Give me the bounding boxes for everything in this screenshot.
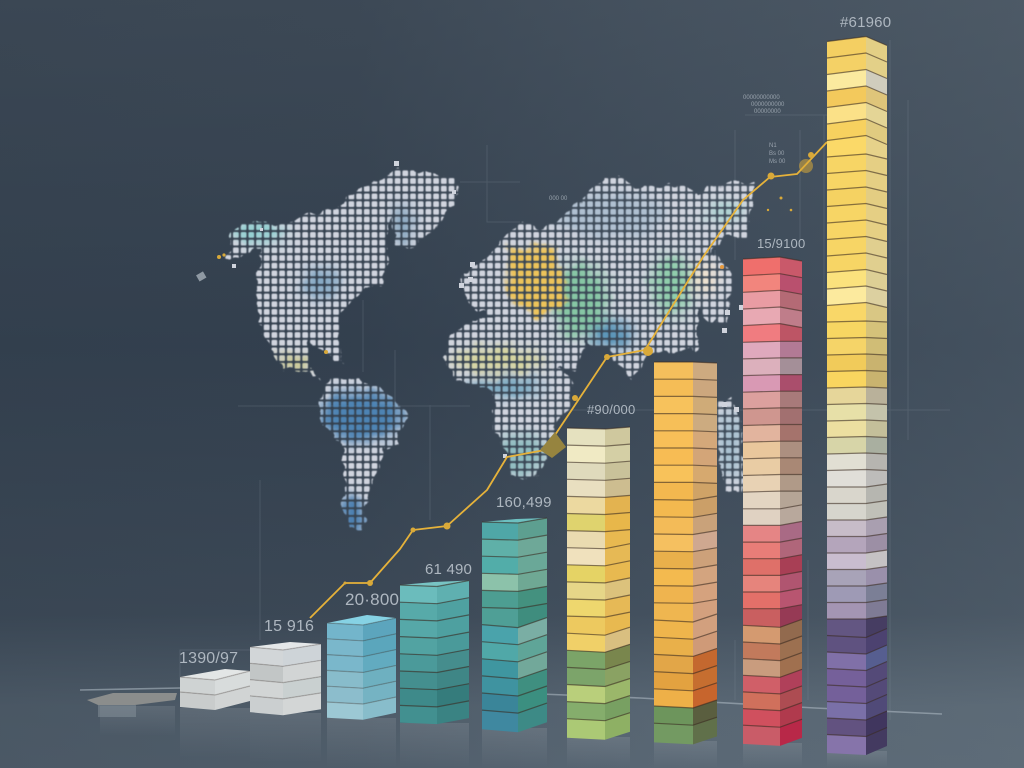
line markers (217, 152, 814, 586)
small annotation texts: 00000000 (754, 109, 781, 115)
bar 3: light blue (327, 615, 396, 720)
small annotation texts: 0000000000 (751, 102, 785, 108)
small annotation texts: Bs 00 (769, 151, 785, 157)
scattered map pixels (196, 161, 744, 458)
value labels: 15 916 (264, 618, 314, 635)
bar 8: pink and red (743, 257, 802, 746)
floor reflections (100, 706, 887, 768)
chart guide lines (180, 40, 950, 720)
value labels: 61 490 (425, 561, 472, 578)
bar 0: flat plate (87, 693, 177, 717)
bar 2: white (250, 642, 321, 715)
bar 9: tallest, yellow to purple (827, 36, 887, 755)
world map dots (224, 167, 756, 531)
value labels: 160,499 (496, 494, 552, 511)
bar 7: orange and green (654, 362, 717, 744)
regional colour tints (230, 193, 745, 538)
floor axis line (80, 688, 942, 714)
small annotation texts (549, 95, 786, 202)
value labels: 1390/97 (179, 650, 238, 667)
bar 1: white (180, 669, 250, 710)
value labels: 20·800 (345, 590, 399, 609)
small annotation texts: 000 00 (549, 196, 568, 202)
yellow region (508, 245, 568, 318)
value labels (179, 14, 891, 667)
value labels: #90/000 (587, 402, 635, 417)
value labels: #61960 (840, 14, 891, 31)
continents base (224, 167, 756, 531)
gold trend line (217, 142, 827, 618)
value labels: 15/9100 (757, 236, 805, 251)
small annotation texts: 00000000000 (743, 95, 780, 101)
small annotation texts: Ms 00 (769, 159, 786, 165)
bar 4: teal (400, 580, 469, 724)
bar 6: cream, yellow and green (567, 427, 630, 740)
small annotation texts: N1 (769, 143, 777, 149)
bar 5: deep teal (482, 518, 547, 732)
